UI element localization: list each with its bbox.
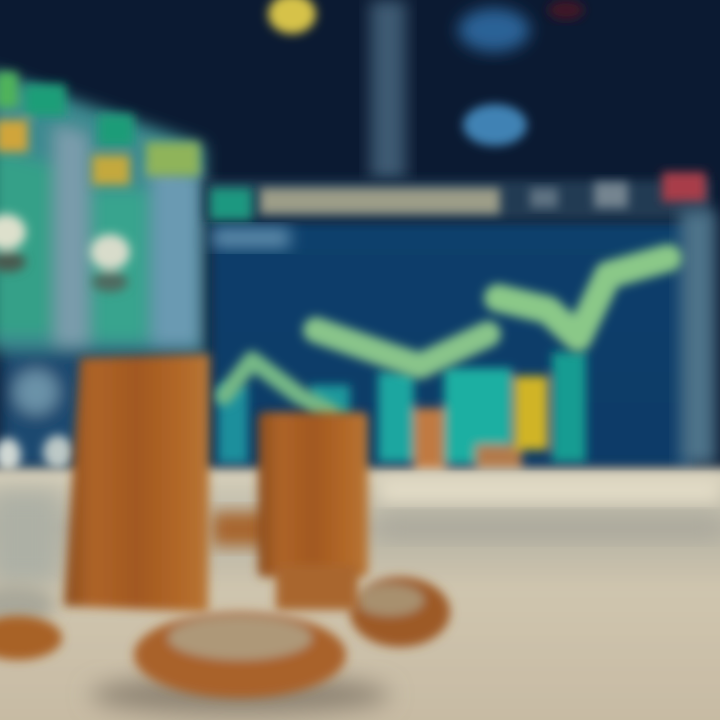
marker: green tab: [0, 72, 18, 108]
marker: lower white dot: [0, 438, 21, 472]
coin: far left flat coin: [0, 616, 62, 660]
bar chart: [218, 352, 586, 476]
header teal tab: [210, 188, 252, 220]
header label block: [260, 188, 500, 214]
coin stacks: [0, 354, 450, 715]
marker: yellow-green tab: [146, 142, 200, 176]
icon: dark red light: [548, 0, 584, 20]
column: grey-blue vertical post: [370, 0, 406, 180]
marker: teal tab: [24, 84, 66, 116]
marker: lower white dot: [43, 435, 73, 469]
header small block: [594, 182, 628, 208]
marker: amber tab: [0, 120, 28, 152]
panel: left teal chart screens: [0, 70, 210, 470]
marker: white and dark dot: [0, 214, 26, 250]
decorative top lights: [268, 0, 584, 180]
marker: dot shadow: [92, 272, 128, 292]
coin: far left top: [0, 585, 55, 625]
sub-header strip: [212, 228, 290, 248]
coin stack: short: [258, 412, 368, 610]
panel: main blue chart screen: [205, 172, 716, 468]
icon: upper blue light: [458, 8, 530, 52]
header bar: [205, 180, 710, 220]
left panel markers: [0, 72, 200, 472]
marker: teal tab: [98, 114, 134, 146]
right post: [680, 210, 716, 465]
coin: front flat coin: [134, 612, 346, 698]
line chart: green trend: [224, 258, 668, 412]
icon: yellow light: [268, 0, 316, 34]
icon: lower blue light: [463, 104, 527, 146]
marker: dot shadow: [0, 252, 26, 272]
floor: beige table: [0, 468, 720, 720]
coin stack: tall: [64, 354, 210, 612]
header red tab: [662, 172, 706, 202]
marker: white and dark dot: [90, 234, 130, 270]
header small block: [530, 188, 558, 208]
shadow under stacks: [90, 675, 390, 715]
coin: right flat coin: [350, 577, 450, 647]
coin stack: connecting coins: [212, 512, 282, 546]
marker: amber tab: [92, 155, 130, 185]
